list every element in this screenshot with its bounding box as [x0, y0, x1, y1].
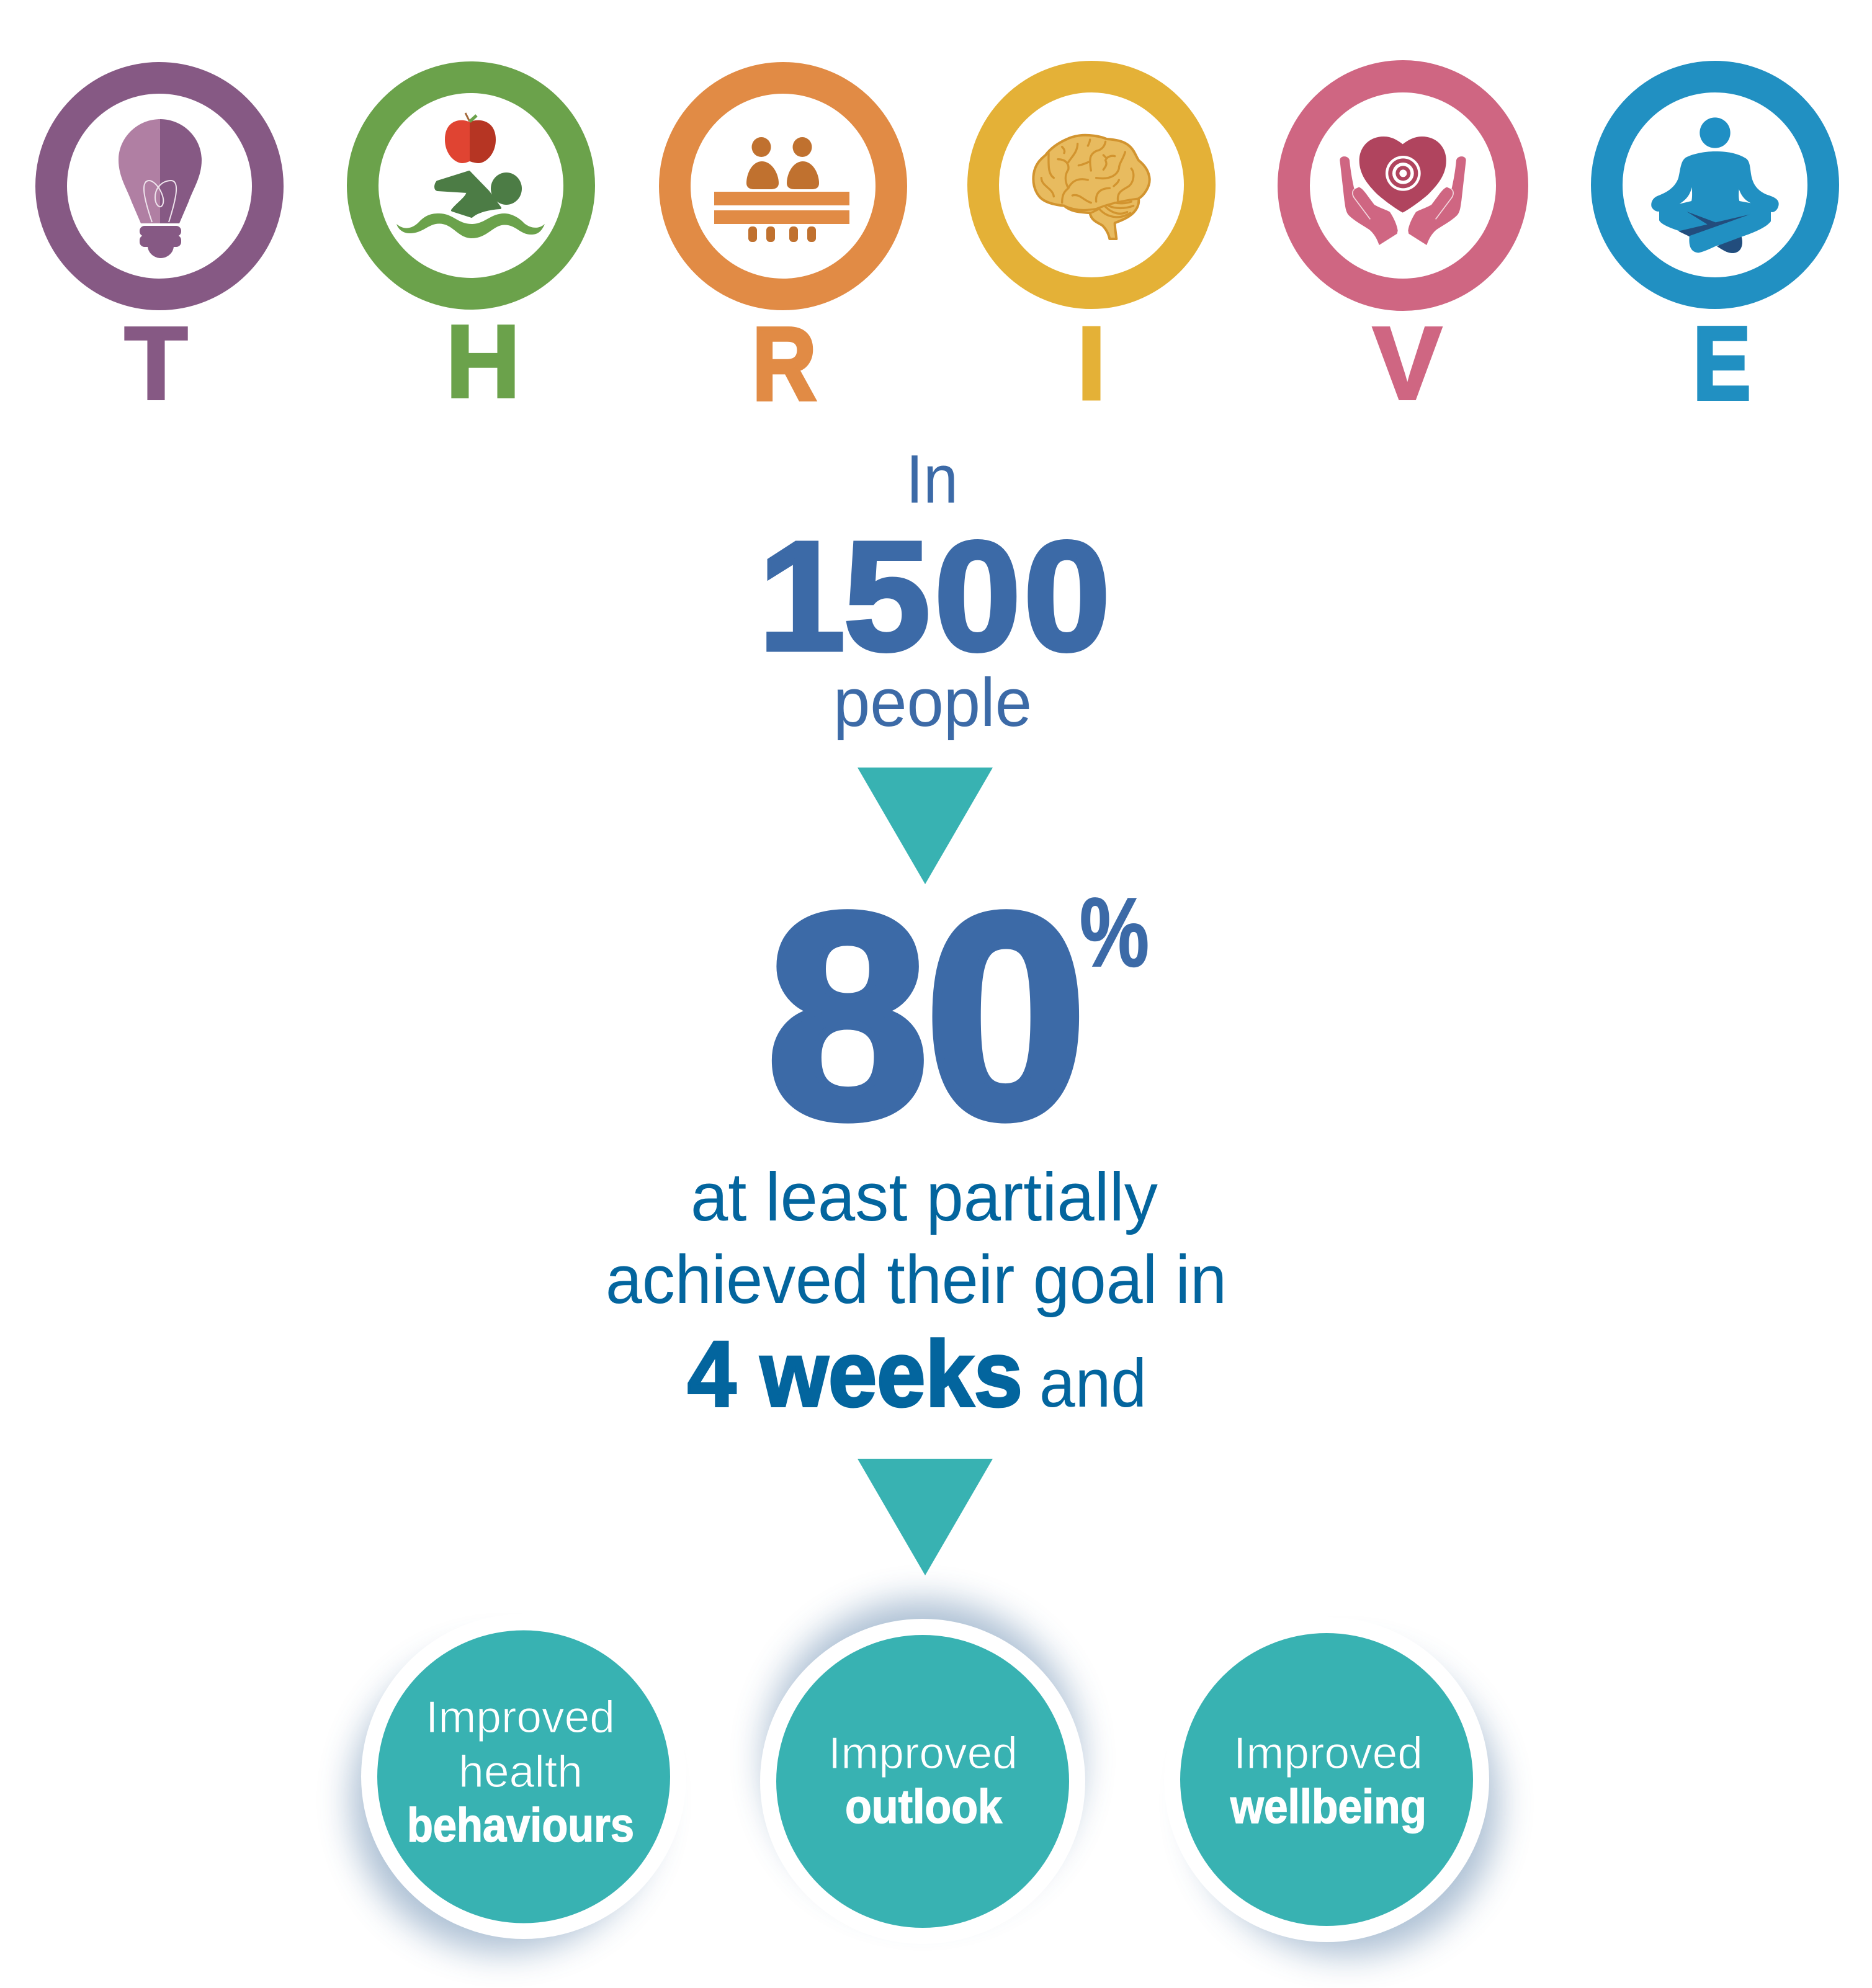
circle: improved outlook [760, 1600, 1085, 1944]
R column: people at table icon and letter [675, 78, 891, 422]
letter R: R [752, 307, 817, 422]
letter I: I [1077, 306, 1106, 421]
icon: two people at a table [714, 137, 849, 242]
icon: brain [1033, 135, 1150, 239]
letter H: H [446, 304, 521, 419]
circle: improved health behaviours: Improved [426, 1693, 615, 1742]
icon ring: blue [1607, 77, 1823, 293]
circle: improved outlook: Improved [828, 1729, 1018, 1778]
panel: THRIVE acronym row [51, 76, 1823, 422]
icon ring: pink [1294, 76, 1512, 295]
icon ring: purple [51, 78, 268, 294]
circle: improved health behaviours: health [459, 1747, 583, 1797]
H column: apple, swimmer icon and letter [362, 77, 580, 419]
text: 4 weeks and: and [1039, 1345, 1147, 1422]
circle: improved wellbeing: wellbeing [1230, 1780, 1426, 1834]
arrow: down triangle 1 [858, 768, 993, 884]
circle: improved wellbeing: Improved [1234, 1729, 1423, 1778]
letter V: V [1373, 306, 1442, 421]
text: achieved their goal in: achieved their goal in [606, 1242, 1227, 1318]
V column: heart in hands icon and letter [1294, 76, 1512, 421]
circle: improved outlook: outlook [845, 1780, 1002, 1834]
icon: heart with target held by hands [1340, 137, 1466, 245]
text: 1500: 1500 [759, 509, 1110, 683]
I column: brain icon and letter [983, 77, 1200, 421]
circle: improved health behaviours [351, 1614, 686, 1953]
circle: improved health behaviours: behaviours [407, 1799, 634, 1852]
icon ring: orange [675, 78, 891, 294]
T column: bulb icon and letter [51, 78, 268, 421]
text: 4 weeks and: 4 weeks [687, 1322, 1023, 1426]
icon: apple and swimmer [396, 113, 545, 238]
E column: meditating figure icon and letter [1607, 77, 1823, 421]
icon: light bulb [119, 119, 202, 258]
text: 80: 80 [767, 854, 1086, 1178]
text: In: In [906, 441, 958, 517]
icon ring: yellow [983, 77, 1200, 293]
panel: outcome circles [351, 1600, 1499, 1956]
icon ring: green [362, 77, 580, 294]
circle: improved wellbeing [1164, 1617, 1499, 1956]
arrow: down triangle 2 [858, 1459, 993, 1575]
text: people: people [833, 665, 1032, 741]
letter E: E [1693, 306, 1751, 421]
text: percent sign: % [1080, 878, 1149, 987]
text: at least partially: at least partially [691, 1159, 1158, 1235]
letter T: T [124, 306, 188, 421]
icon: meditating person [1651, 117, 1779, 253]
